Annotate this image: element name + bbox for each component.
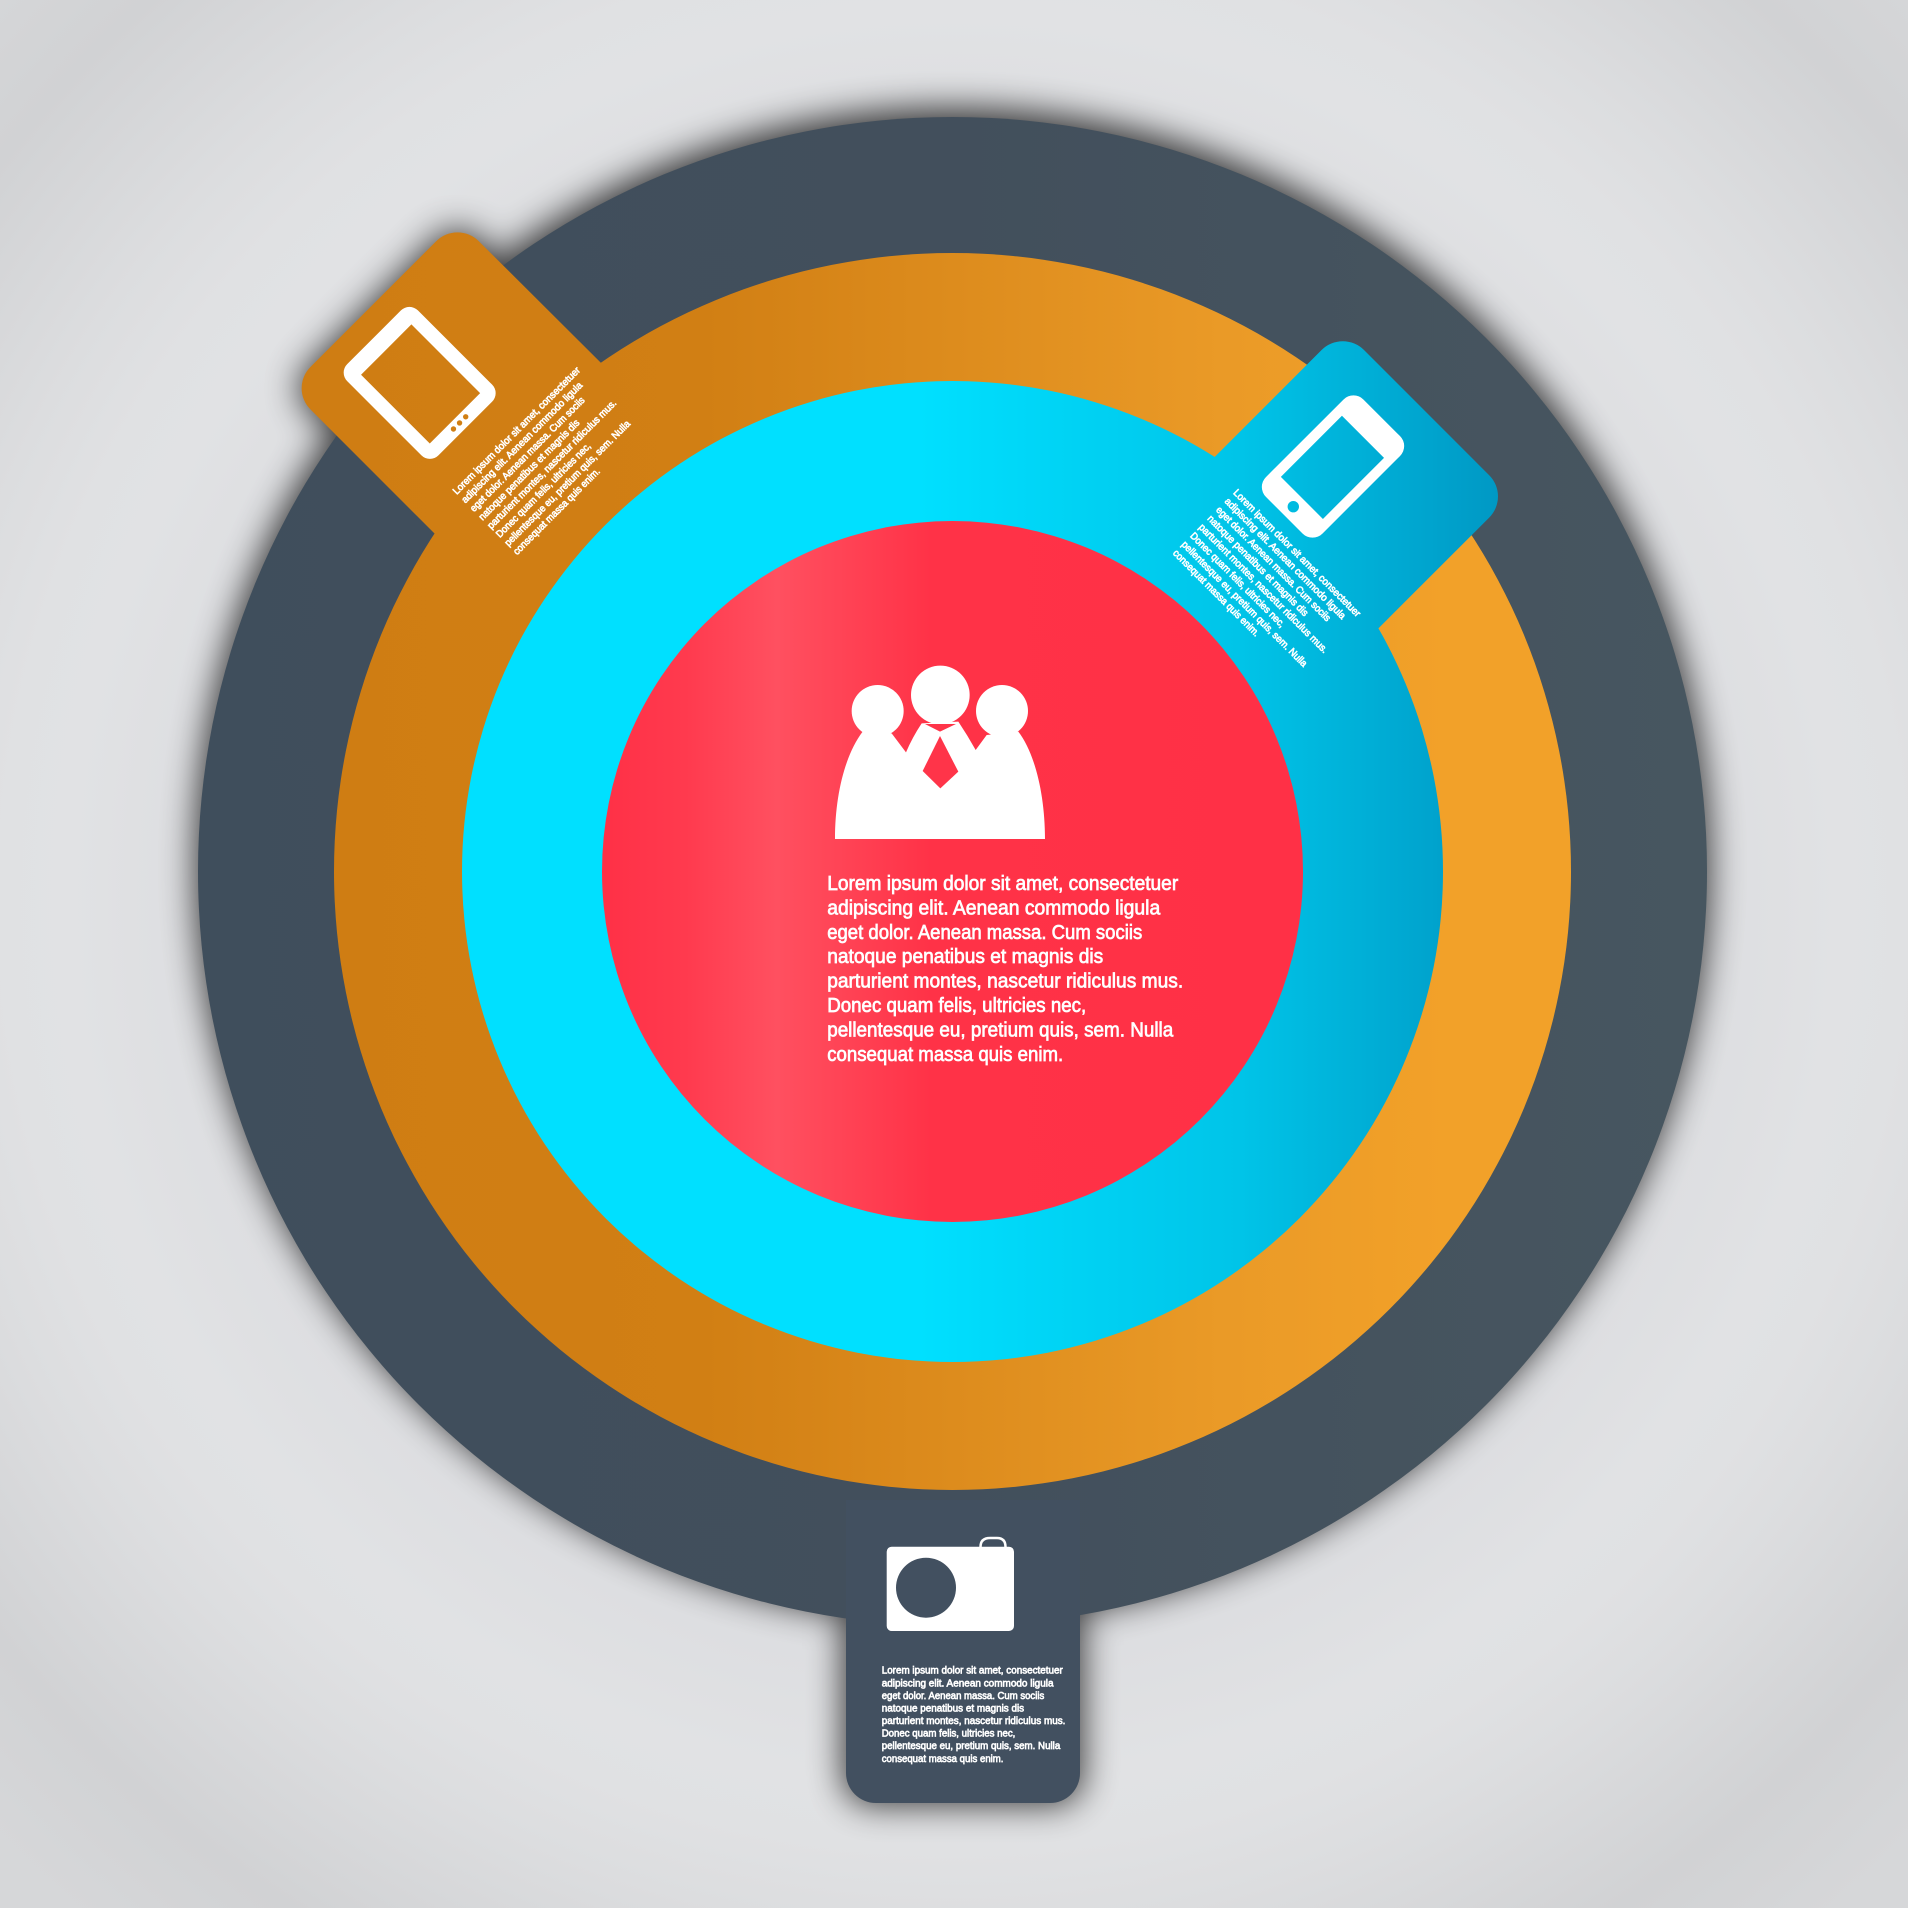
text block: blue tab	[1170, 488, 1364, 682]
orange tab shape	[302, 232, 657, 587]
text block: blue tab: eget dolor. Aenean massa. Cum sociis	[1213, 505, 1332, 624]
text block: blue tab: adipiscing elit. Aenean commodo ligula	[1222, 496, 1348, 622]
text block: camera tab: natoque penatibus et magnis dis	[882, 1703, 1024, 1714]
text block: centre: Donec quam felis, ultricies nec,	[827, 995, 1086, 1017]
text block: centre: eget dolor. Aenean massa. Cum sociis	[827, 922, 1142, 944]
text block: camera tab: pellentesque eu, pretium quis, sem. Nulla	[882, 1741, 1060, 1752]
text block: orange tab: consequat massa quis enim.	[511, 466, 603, 558]
text block: camera tab: Donec quam felis, ultricies nec,	[882, 1729, 1015, 1740]
icon: business people	[835, 666, 1045, 839]
text block: centre: parturient montes, nascetur ridiculus mus.	[827, 971, 1183, 993]
text block: centre: adipiscing elit. Aenean commodo ligula	[827, 897, 1161, 919]
outer ring	[198, 117, 1707, 1626]
text block: centre: Lorem ipsum dolor sit amet, consectetuer	[827, 873, 1179, 895]
text block: blue tab: natoque penatibus et magnis dis	[1205, 514, 1310, 619]
blue tab shape	[1161, 341, 1498, 678]
panel: red centre circle	[602, 521, 1303, 1222]
icon: tablet	[339, 302, 501, 464]
red circle	[602, 521, 1303, 1222]
text block: camera tab: Lorem ipsum dolor sit amet, consectetuer	[882, 1666, 1063, 1677]
text block: blue tab: Lorem ipsum dolor sit amet, consectetuer	[1231, 488, 1363, 620]
text block: orange tab: natoque penatibus et magnis dis	[477, 418, 582, 523]
panel: gold ring	[334, 253, 1571, 1490]
text block: centre: pellentesque eu, pretium quis, sem. Nulla	[827, 1019, 1174, 1041]
camera tab shape	[846, 1500, 1080, 1803]
text block: orange tab: adipiscing elit. Aenean commodo ligula	[460, 380, 585, 506]
text block: centre	[827, 873, 1183, 1066]
drop shadow	[196, 108, 1710, 1805]
text block: camera tab	[882, 1666, 1065, 1765]
panel: orange tablet tab	[302, 232, 657, 587]
text block: camera tab: consequat massa quis enim.	[882, 1754, 1003, 1765]
text block: camera tab: adipiscing elit. Aenean commodo ligula	[882, 1678, 1054, 1689]
text block: blue tab: consequat massa quis enim.	[1170, 548, 1261, 639]
icon: camera	[887, 1538, 1014, 1631]
text block: orange tab: Donec quam felis, ultricies nec,	[494, 441, 594, 540]
text block: blue tab: parturient montes, nascetur ridiculus mus.	[1196, 522, 1330, 656]
text block: centre: natoque penatibus et magnis dis	[827, 946, 1103, 968]
panel: cyan ring	[462, 381, 1443, 1362]
text block: centre: consequat massa quis enim.	[827, 1044, 1063, 1066]
text block: camera tab: eget dolor. Aenean massa. Cum sociis	[882, 1691, 1044, 1702]
text block: camera tab: parturient montes, nascetur ridiculus mus.	[882, 1716, 1065, 1727]
text block: orange tab: parturient montes, nascetur ridiculus mus.	[486, 398, 619, 532]
text block: blue tab: pellentesque eu, pretium quis, sem. Nulla	[1179, 539, 1309, 670]
panel: blue smartphone tab	[1161, 341, 1498, 682]
text block: orange tab: Lorem ipsum dolor sit amet, consectetuer	[451, 365, 583, 497]
icon: smartphone	[1256, 390, 1410, 543]
panel: outer dark ring with camera tab	[198, 117, 1707, 1803]
text block: orange tab: eget dolor. Aenean massa. Cum sociis	[468, 395, 587, 514]
text block: orange tab	[451, 363, 645, 558]
text block: orange tab: pellentesque eu, pretium quis, sem. Nulla	[503, 418, 633, 549]
text block: blue tab: Donec quam felis, ultricies nec,	[1187, 531, 1287, 630]
